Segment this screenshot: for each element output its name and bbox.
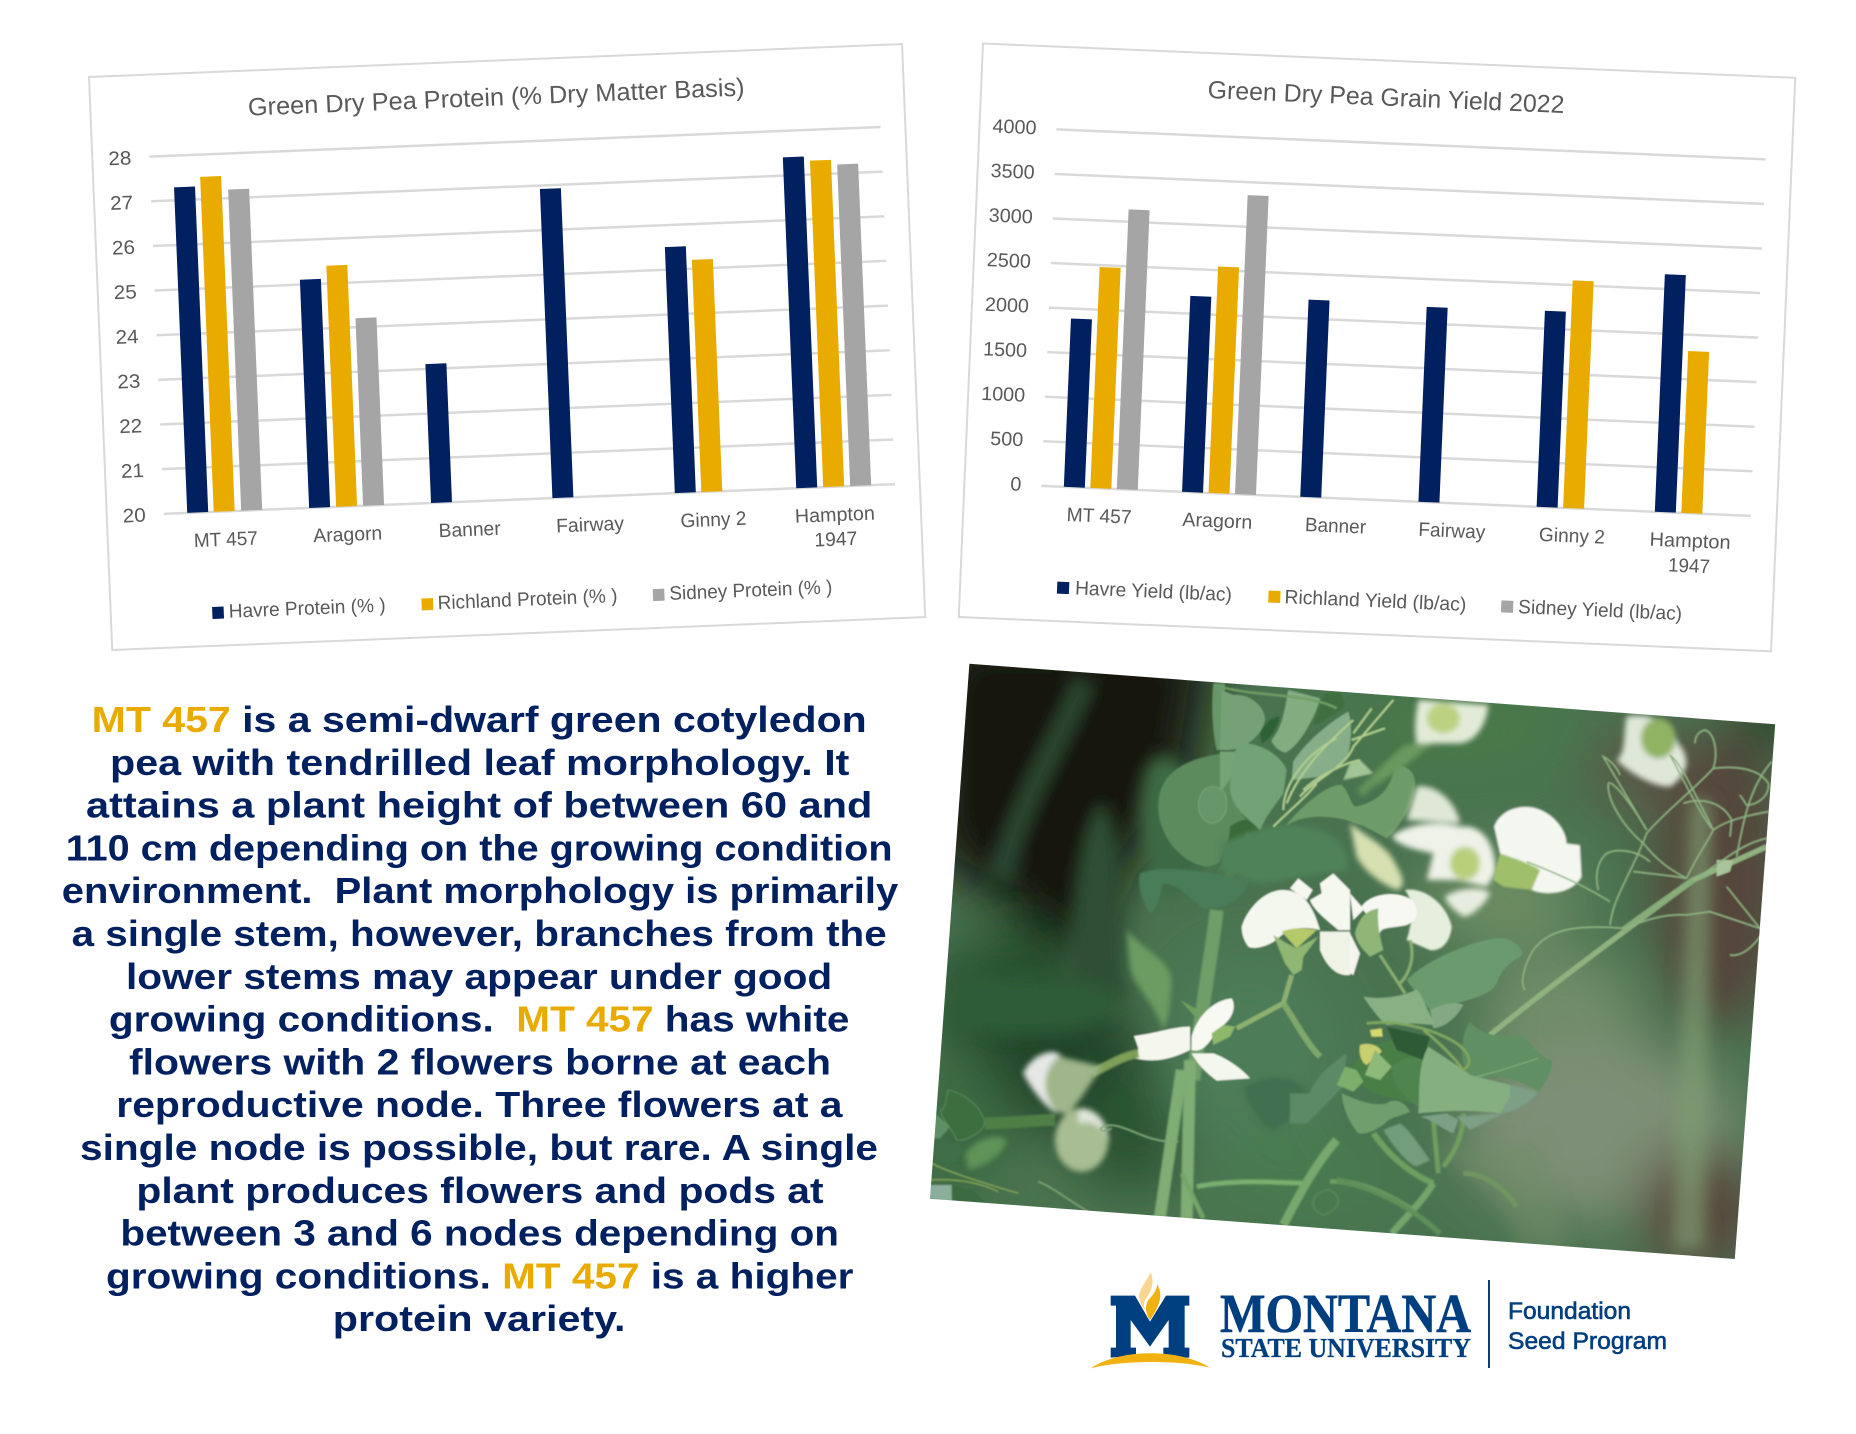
- category labels: yield: MT 457: [1066, 504, 1132, 529]
- text block: variety description: lower stems may appear under good: [126, 956, 832, 997]
- bars: Richland protein: [200, 151, 844, 512]
- category labels: yield: Aragorn: [1182, 509, 1253, 534]
- text block: variety description: environment. Plant morphology is primarily: [62, 870, 898, 911]
- category labels: protein: Fairway: [556, 513, 625, 537]
- lower leaf cluster: [1290, 989, 1552, 1233]
- photo: white pea flowers and tendrils: [930, 664, 1776, 1259]
- program name: Seed Program: [1508, 1328, 1667, 1355]
- text block: variety description: protein variety.: [333, 1298, 626, 1339]
- wordmark: Montana: MONTANA: [1220, 1283, 1471, 1344]
- upper leaf cluster: right part: [1220, 687, 1415, 883]
- divider: [1488, 1280, 1490, 1368]
- y axis labels: yield: 2500: [986, 249, 1031, 273]
- blurred background stems and leaves: [950, 680, 1712, 1250]
- bottom stems and blurred leaf: [1182, 1060, 1413, 1225]
- y axis labels: protein: 20: [122, 505, 146, 527]
- category labels: protein: Ginny 2: [680, 508, 747, 532]
- category labels: yield: Fairway: [1418, 519, 1486, 544]
- program name: [1508, 1298, 1667, 1355]
- y axis labels: yield: 3500: [990, 160, 1035, 184]
- text block: variety description: reproductive node. Three flowers at a: [116, 1084, 844, 1125]
- y axis labels: yield: 1500: [983, 338, 1028, 362]
- category labels: yield: Ginny 2: [1538, 524, 1605, 549]
- legend: protein: [212, 576, 833, 623]
- text block: variety description: attains a plant height of between 60 and: [86, 785, 872, 826]
- chart title: protein: Green Dry Pea Protein (% Dry Matter Basis): [247, 73, 745, 122]
- bars: Havre yield: [1064, 249, 1686, 513]
- category labels: protein: Aragorn: [313, 523, 383, 547]
- y axis labels: protein: 28: [108, 147, 132, 170]
- category labels: protein: Hampton: [794, 503, 875, 528]
- y axis labels: yield: 1000: [981, 383, 1026, 407]
- y axis labels: protein: 21: [121, 460, 144, 483]
- text block: variety description: single node is possible, but rare. A single: [80, 1127, 878, 1168]
- panel: grain yield bar chart: [959, 44, 1795, 651]
- bars: Richland yield: [1090, 260, 1712, 514]
- bars: Sidney protein: [228, 164, 871, 511]
- blooming flowers: [1134, 873, 1350, 1081]
- y axis labels: yield: 2000: [985, 294, 1030, 318]
- legend: yield: [1057, 577, 1682, 625]
- category labels: protein: [193, 503, 876, 577]
- category labels: protein: MT 457: [193, 528, 258, 552]
- wordmark: State University: STATE UNIVERSITY: [1221, 1333, 1471, 1363]
- legend: yield: Sidney Yield (lb/ac): [1518, 596, 1682, 625]
- lower left buds, leaves and tendrils: [929, 1052, 1182, 1217]
- y axis labels: yield: 500: [990, 428, 1024, 451]
- legend: protein: Havre Protein (% ): [228, 594, 386, 623]
- category labels: protein: Banner: [438, 518, 502, 542]
- program name: Foundation: [1508, 1298, 1631, 1325]
- bars: Sidney yield: [1117, 190, 1269, 495]
- legend: yield: Richland Yield (lb/ac): [1284, 586, 1467, 616]
- y axis labels: protein: 24: [115, 326, 139, 349]
- legend: protein: Sidney Protein (% ): [669, 576, 833, 605]
- panel: protein bar chart: [89, 44, 925, 650]
- text block: variety description: growing conditions. MT 457 has white: [109, 999, 849, 1040]
- bars: Havre protein: [174, 157, 817, 513]
- text block: variety description: [62, 699, 898, 1339]
- text block: variety description: flowers with 2 flowers borne at each: [129, 1041, 831, 1082]
- y axis labels: protein: 27: [110, 192, 134, 215]
- category labels: yield: Banner: [1305, 514, 1367, 539]
- chart title: yield: Green Dry Pea Grain Yield 2022: [1207, 76, 1565, 119]
- category labels: protein: 1947: [814, 528, 858, 552]
- upper leaf cluster: left part: [1127, 683, 1260, 1080]
- y axis labels: yield: 4000: [992, 115, 1037, 139]
- y axis labels: protein: [108, 147, 146, 527]
- category labels: yield: 1947: [1668, 554, 1711, 578]
- category labels: yield: [1065, 504, 1731, 579]
- text block: variety description: a single stem, however, branches from the: [72, 913, 887, 954]
- text block: variety description: 110 cm depending on the growing condition: [66, 827, 893, 868]
- y axis labels: yield: 3000: [988, 205, 1033, 228]
- text block: variety description: plant produces flowers and pods at: [136, 1170, 824, 1211]
- y axis labels: protein: 23: [117, 371, 141, 393]
- y axis labels: protein: 25: [113, 281, 137, 304]
- right flowers, leaves and tendrils: [1350, 700, 1772, 1035]
- y axis labels: yield: 0: [1010, 473, 1022, 496]
- logo: Montana State University Foundation Seed Program: [1091, 1272, 1667, 1368]
- text block: variety description: growing conditions. MT 457 is a higher: [106, 1255, 853, 1296]
- legend: yield: Havre Yield (lb/ac): [1075, 577, 1232, 606]
- y axis labels: protein: 26: [112, 237, 135, 260]
- text block: variety description: between 3 and 6 nodes depending on: [120, 1213, 839, 1254]
- y axis labels: yield: [977, 115, 1037, 496]
- y axis labels: protein: 22: [119, 415, 143, 438]
- legend: protein: Richland Protein (% ): [437, 585, 618, 614]
- icon: MSU M with flame and arc: [1091, 1272, 1210, 1368]
- category labels: yield: Hampton: [1649, 529, 1731, 554]
- text block: variety description: pea with tendrilled leaf morphology. It: [110, 742, 849, 783]
- text block: variety description: MT 457 is a semi-dwarf green cotyledon: [92, 699, 867, 740]
